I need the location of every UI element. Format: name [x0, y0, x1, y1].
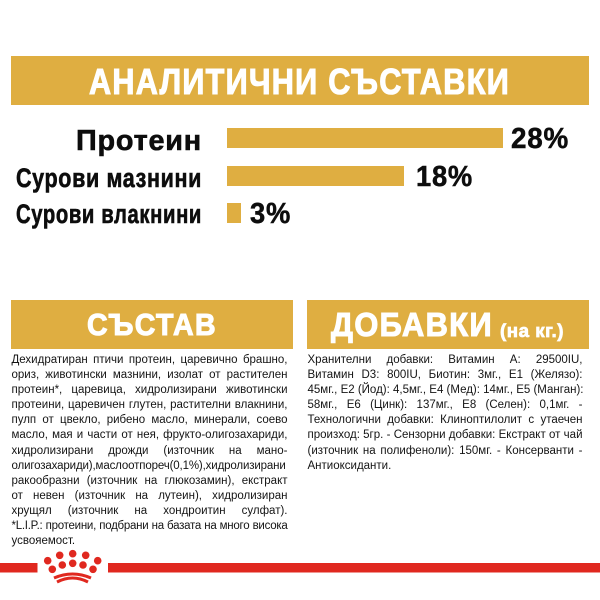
row: protein: Протеин	[76, 125, 202, 157]
text block: composition: Дехидратиран птичи протеин, царевично брашно,	[12, 354, 288, 366]
panel: additives heading: ДОБАВКИ	[331, 306, 493, 343]
text block: composition: протеини, царевичен глутен, растителни влакнини,	[12, 399, 288, 411]
text block: additives: Антиоксиданти.	[308, 460, 391, 472]
red footer band	[0, 563, 600, 572]
panel: additives heading	[307, 300, 589, 349]
text block: additives	[308, 354, 583, 472]
text block: composition: хрущял (източник на хондроитин сулфат).	[12, 505, 288, 517]
text block: composition: хидролизирани дрожди (източник на мано-	[12, 445, 288, 457]
row: crude fibre: 3%	[250, 198, 291, 230]
panel: composition heading: СЪСТАВ	[87, 307, 217, 342]
text block: additives: произход: 5гр. - Сензорни добавки: Екстракт от чай	[308, 429, 582, 441]
text block: composition: ориз, животински мазнини, изолат от растителен	[12, 369, 288, 381]
row: protein	[76, 123, 569, 157]
icon: royal crown logo	[44, 550, 101, 582]
row: crude fat	[16, 161, 473, 193]
text block: composition: усвояемост.	[12, 535, 75, 547]
text block: composition: ракообразни (източник на глюкозамин), екстракт	[12, 475, 288, 487]
text block: additives: Хранителни добавки: Витамин A: 29500IU,	[308, 354, 582, 366]
panel: composition heading	[11, 300, 293, 349]
text block: composition: от невен (източник на лутеин), хидролизиран	[12, 490, 288, 502]
text block: additives: 45мг., E2 (Йод): 4,5мг., E4 (Мед): 14мг., E5 (Манган):	[308, 384, 583, 396]
text block: composition: протеин*, царевица, хидролизирани животински	[12, 384, 288, 396]
row: crude fat: 18%	[416, 161, 473, 193]
text block: additives: Технологични добавки: Клиноптилолит с утаечен	[308, 414, 582, 426]
row: crude fat: Сурови мазнини	[16, 163, 202, 193]
text block: composition	[12, 354, 288, 547]
panel: additives heading: (на кг.)	[500, 321, 564, 341]
text block: composition: *L.I.P.: протеини, подбрани на базата на много висока	[12, 520, 288, 532]
text block: composition: масло, мая и части от нея, фрукто-олигозахариди,	[12, 429, 288, 441]
row: protein: 28%	[511, 123, 569, 155]
text block: additives: 58мг., E6 (Цинк): 137мг., E8 (Селен): 0,1мг. -	[308, 399, 582, 411]
row: crude fibre: Сурови влакнини	[16, 199, 202, 229]
panel: analytical constituents banner	[11, 56, 589, 105]
bar chart: analytical constituents	[16, 123, 569, 230]
text block: additives: Витамин D3: 800IU, Биотин: 3мг., E1 (Желязо):	[308, 369, 582, 381]
text block: additives: (източник на полифеноли): 150мг. - Консерванти -	[308, 445, 582, 457]
title: АНАЛИТИЧНИ СЪСТАВКИ	[89, 61, 510, 102]
text block: composition: пулп от цвекло, рибено масло, минерали, соево	[12, 414, 288, 426]
text block: composition: олигозахариди),маслоотпореч(0,1%),хидролизирани	[12, 460, 286, 472]
